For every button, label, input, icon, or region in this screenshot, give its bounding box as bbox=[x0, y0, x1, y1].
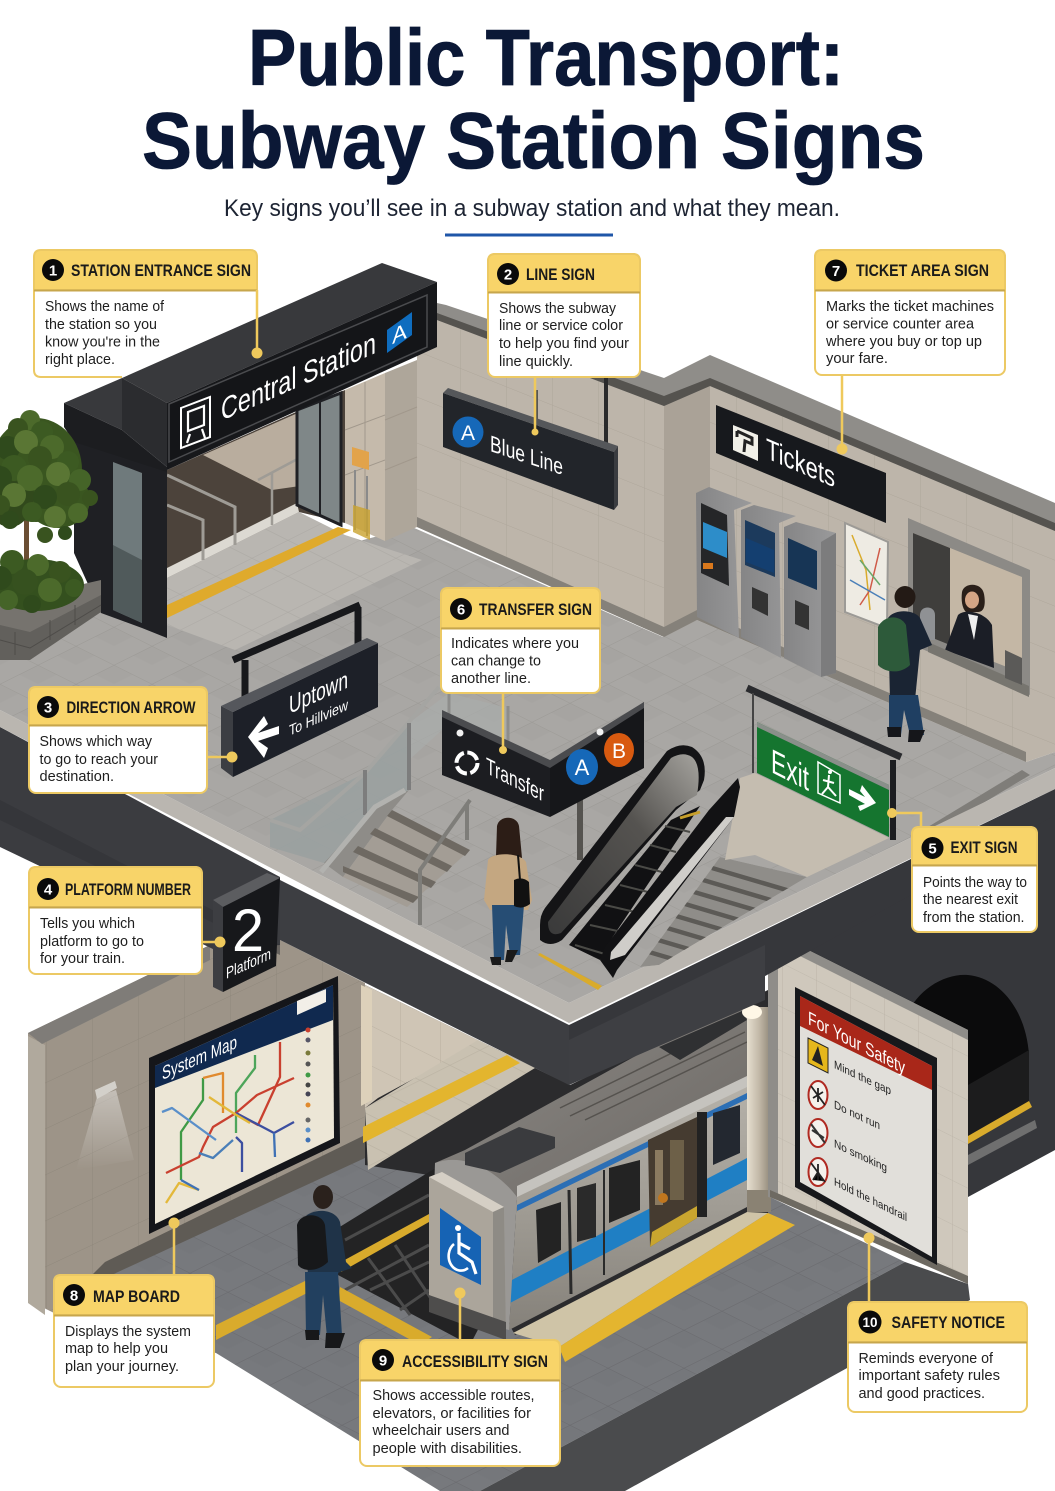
right balustrade bbox=[600, 778, 740, 978]
doors and windows bbox=[536, 1202, 561, 1263]
poster: small route map bbox=[845, 523, 888, 628]
callout 6: transfer sign: can change to bbox=[451, 654, 541, 670]
callout 4: platform number: 4 bbox=[44, 882, 53, 898]
sign: Uptown direction: Uptown bbox=[289, 665, 348, 720]
sign: for your safety bbox=[795, 987, 937, 1265]
panel: back walls bbox=[417, 303, 1055, 762]
callout 1: station entrance sign bbox=[34, 250, 262, 377]
callout 9: accessibility sign: elevators, or facilities for bbox=[372, 1406, 531, 1422]
sign: Uptown direction: To Hillview bbox=[289, 697, 348, 740]
callout 6: transfer sign: 6 bbox=[457, 602, 465, 618]
sign: platform 2: Platform bbox=[226, 944, 271, 983]
callout 9: accessibility sign: ACCESSIBILITY SIGN bbox=[402, 1353, 548, 1371]
callout 4: platform number bbox=[29, 867, 226, 974]
sign: platform 2: 2 bbox=[232, 897, 264, 964]
map board: system map: System Map bbox=[162, 1031, 237, 1085]
glass balustrade behind transfer sign bbox=[409, 690, 508, 760]
callout 6: transfer sign bbox=[441, 588, 600, 754]
entrance side walls bbox=[345, 360, 417, 541]
callout 6: transfer sign: Indicates where you bbox=[451, 636, 579, 652]
sign: for your safety: For Your Safety bbox=[808, 1008, 906, 1079]
callout 6: transfer sign: another line. bbox=[451, 671, 531, 687]
title: Subway Station Signs bbox=[142, 96, 925, 185]
callout 2: line sign: LINE SIGN bbox=[526, 266, 595, 284]
callout 6: transfer sign: TRANSFER SIGN bbox=[479, 601, 592, 619]
callout 5: exit sign bbox=[887, 808, 1037, 932]
panel: area under the upper floor bbox=[361, 985, 768, 1335]
callout 5: exit sign: from the station. bbox=[923, 910, 1024, 926]
left pier and door bbox=[74, 440, 167, 638]
callout 3: direction arrow: destination. bbox=[40, 769, 114, 785]
sign: Tickets: Tickets bbox=[766, 433, 835, 494]
callout 1: station entrance sign: the station so you bbox=[45, 317, 157, 333]
callout 9: accessibility sign: 9 bbox=[379, 1352, 387, 1370]
callout 7: ticket area sign: where you buy or top up bbox=[825, 334, 982, 350]
callout 2: line sign: line quickly. bbox=[499, 354, 573, 370]
callout 3: direction arrow: DIRECTION ARROW bbox=[66, 699, 196, 717]
icon: wheelchair sign bbox=[440, 1208, 481, 1285]
callout 10: safety notice: Reminds everyone of bbox=[858, 1351, 994, 1367]
sign: Blue Line bbox=[443, 375, 618, 510]
title: Public Transport: bbox=[248, 13, 844, 102]
callout 9: accessibility sign: people with disabilities. bbox=[372, 1441, 522, 1457]
map board: system map bbox=[149, 976, 340, 1234]
callout 5: exit sign: the nearest exit bbox=[923, 892, 1018, 908]
callout 2: line sign: line or service color bbox=[499, 318, 623, 334]
person: man at platform bbox=[297, 1185, 352, 1348]
sign: Transfer: A bbox=[575, 755, 590, 780]
canopy roof bbox=[64, 263, 437, 472]
panel: entrance building bbox=[64, 263, 437, 638]
callout 8: map board: map to help you bbox=[65, 1341, 168, 1357]
sign: for your safety: Hold the handrail bbox=[834, 1175, 907, 1224]
callout 8: map board: Displays the system bbox=[65, 1324, 191, 1340]
planter bbox=[0, 580, 101, 660]
panel: upper level fascia left bbox=[0, 727, 1055, 1085]
sign: for your safety: No smoking bbox=[834, 1137, 887, 1175]
stair side wall bbox=[324, 790, 409, 877]
callout 10: safety notice: 10 bbox=[862, 1315, 878, 1330]
callout 1: station entrance sign: STATION ENTRANCE SIGN bbox=[71, 262, 251, 280]
title bbox=[142, 13, 925, 185]
person: customer at window bbox=[878, 586, 932, 742]
callout 3: direction arrow: Shows which way bbox=[40, 734, 153, 750]
callout 7: ticket area sign: 7 bbox=[832, 263, 840, 280]
callout 10: safety notice: and good practices. bbox=[858, 1386, 985, 1402]
callout 4: platform number: platform to go to bbox=[40, 934, 144, 950]
sign: Central Station: Central Station bbox=[221, 325, 376, 428]
machine 3 bbox=[784, 522, 836, 677]
glass door bbox=[297, 393, 341, 525]
panel: lower floor front fascia bbox=[480, 1262, 970, 1491]
yellow floor line at escalator bbox=[538, 953, 602, 990]
callout 7: ticket area sign bbox=[815, 250, 1005, 454]
column beside train bbox=[742, 1005, 771, 1212]
callout 4: platform number: PLATFORM NUMBER bbox=[65, 881, 191, 899]
person: woman on stair level bbox=[484, 818, 532, 965]
callout 9: accessibility sign: Shows accessible routes, bbox=[372, 1388, 534, 1404]
callout 2: line sign: Shows the subway bbox=[499, 301, 617, 317]
platform edge and tactile strip bbox=[513, 1212, 795, 1362]
icon: tree in planter bbox=[0, 410, 101, 660]
machine 1 bbox=[696, 487, 752, 638]
callout 10: safety notice bbox=[848, 1232, 1027, 1412]
callout 1: station entrance sign: Shows the name of bbox=[45, 299, 165, 315]
sign: Central Station bbox=[169, 295, 427, 462]
entrance floor bbox=[167, 512, 422, 650]
callout 10: safety notice: important safety rules bbox=[858, 1368, 1000, 1384]
panel: lower platform back wall bbox=[28, 940, 365, 1315]
callout 2: line sign: 2 bbox=[504, 266, 512, 284]
stairs beside escalator bbox=[640, 857, 807, 978]
callout 8: map board bbox=[54, 1218, 214, 1387]
callout 7: ticket area sign: or service counter area bbox=[826, 316, 975, 332]
entrance interior bbox=[167, 390, 345, 578]
train bbox=[430, 1005, 747, 1330]
stair with glass balustrade bbox=[270, 687, 508, 925]
tree foliage and trunk bbox=[0, 410, 98, 613]
icon: running man bbox=[818, 762, 840, 803]
callout 8: map board: 8 bbox=[70, 1288, 78, 1304]
callout 3: direction arrow: 3 bbox=[44, 700, 52, 716]
callout 4: platform number: for your train. bbox=[40, 951, 125, 967]
callout 1: station entrance sign: right place. bbox=[45, 352, 115, 368]
steps bbox=[343, 800, 470, 925]
left balustrade bbox=[540, 745, 705, 944]
sign: platform 2 bbox=[213, 873, 280, 992]
track pit bbox=[338, 1110, 540, 1345]
AC units bbox=[465, 1127, 555, 1173]
sign: Transfer: Transfer bbox=[486, 753, 544, 808]
icon: train bbox=[181, 397, 210, 448]
panel: safety wall bbox=[768, 930, 968, 1284]
glass balustrade bbox=[270, 687, 439, 863]
sign: for your safety: Mind the gap bbox=[834, 1058, 891, 1098]
sign: Central Station: A bbox=[392, 317, 407, 349]
icon: wall sconce light bbox=[76, 1081, 134, 1170]
person: clerk bbox=[945, 585, 994, 668]
callout 4: platform number: Tells you which bbox=[40, 916, 135, 932]
callout 3: direction arrow: to go to reach your bbox=[40, 752, 158, 768]
callout 5: exit sign: 5 bbox=[928, 840, 937, 858]
callout 9: accessibility sign: wheelchair users and bbox=[372, 1423, 510, 1439]
escalator steps bbox=[569, 806, 700, 960]
callout 9: accessibility sign bbox=[360, 1288, 560, 1466]
panel: accessibility pillar with sign bbox=[429, 1172, 506, 1340]
sign: Exit: Exit bbox=[771, 741, 809, 799]
ticket window with clerk bbox=[908, 518, 1030, 697]
escalator and exit stair bbox=[540, 745, 889, 978]
panel: lower level tunnel block bbox=[765, 790, 1055, 1197]
sign: Transfer bbox=[442, 702, 644, 860]
callout 1: station entrance sign: know you're in the bbox=[45, 334, 160, 350]
title underline bbox=[445, 234, 613, 236]
callout 8: map board: MAP BOARD bbox=[93, 1288, 180, 1306]
sign: Tickets bbox=[716, 405, 886, 523]
sign: Uptown direction bbox=[221, 605, 378, 777]
callout 7: ticket area sign: your fare. bbox=[826, 351, 888, 367]
callout 3: direction arrow bbox=[29, 687, 238, 793]
callout 5: exit sign: EXIT SIGN bbox=[950, 839, 1018, 857]
callout 8: map board: plan your journey. bbox=[65, 1359, 179, 1375]
ticket machines bbox=[696, 487, 836, 677]
sign: Exit bbox=[747, 688, 901, 840]
callout 10: safety notice: SAFETY NOTICE bbox=[892, 1314, 1005, 1332]
panel: upper concourse floor bbox=[0, 527, 1055, 1023]
panel: lower platform floor bbox=[54, 1090, 905, 1491]
callout 7: ticket area sign: TICKET AREA SIGN bbox=[856, 262, 989, 280]
callout 1: station entrance sign: 1 bbox=[49, 262, 57, 280]
sign: for your safety: Do not run bbox=[834, 1098, 880, 1132]
sign: Blue Line: Blue Line bbox=[490, 432, 563, 481]
callout 7: ticket area sign: Marks the ticket machines bbox=[826, 299, 994, 315]
callout 2: line sign bbox=[488, 254, 640, 436]
machine 2 bbox=[741, 505, 796, 658]
sign: Blue Line: A bbox=[461, 422, 475, 445]
wall under exit sign bbox=[725, 773, 889, 877]
callout 2: line sign: to help you find your bbox=[499, 336, 629, 352]
callout 5: exit sign: Points the way to bbox=[923, 875, 1027, 891]
subtitle: Key signs you’ll see in a subway station and what they mean. bbox=[224, 195, 840, 222]
sign: Transfer: B bbox=[612, 740, 626, 763]
